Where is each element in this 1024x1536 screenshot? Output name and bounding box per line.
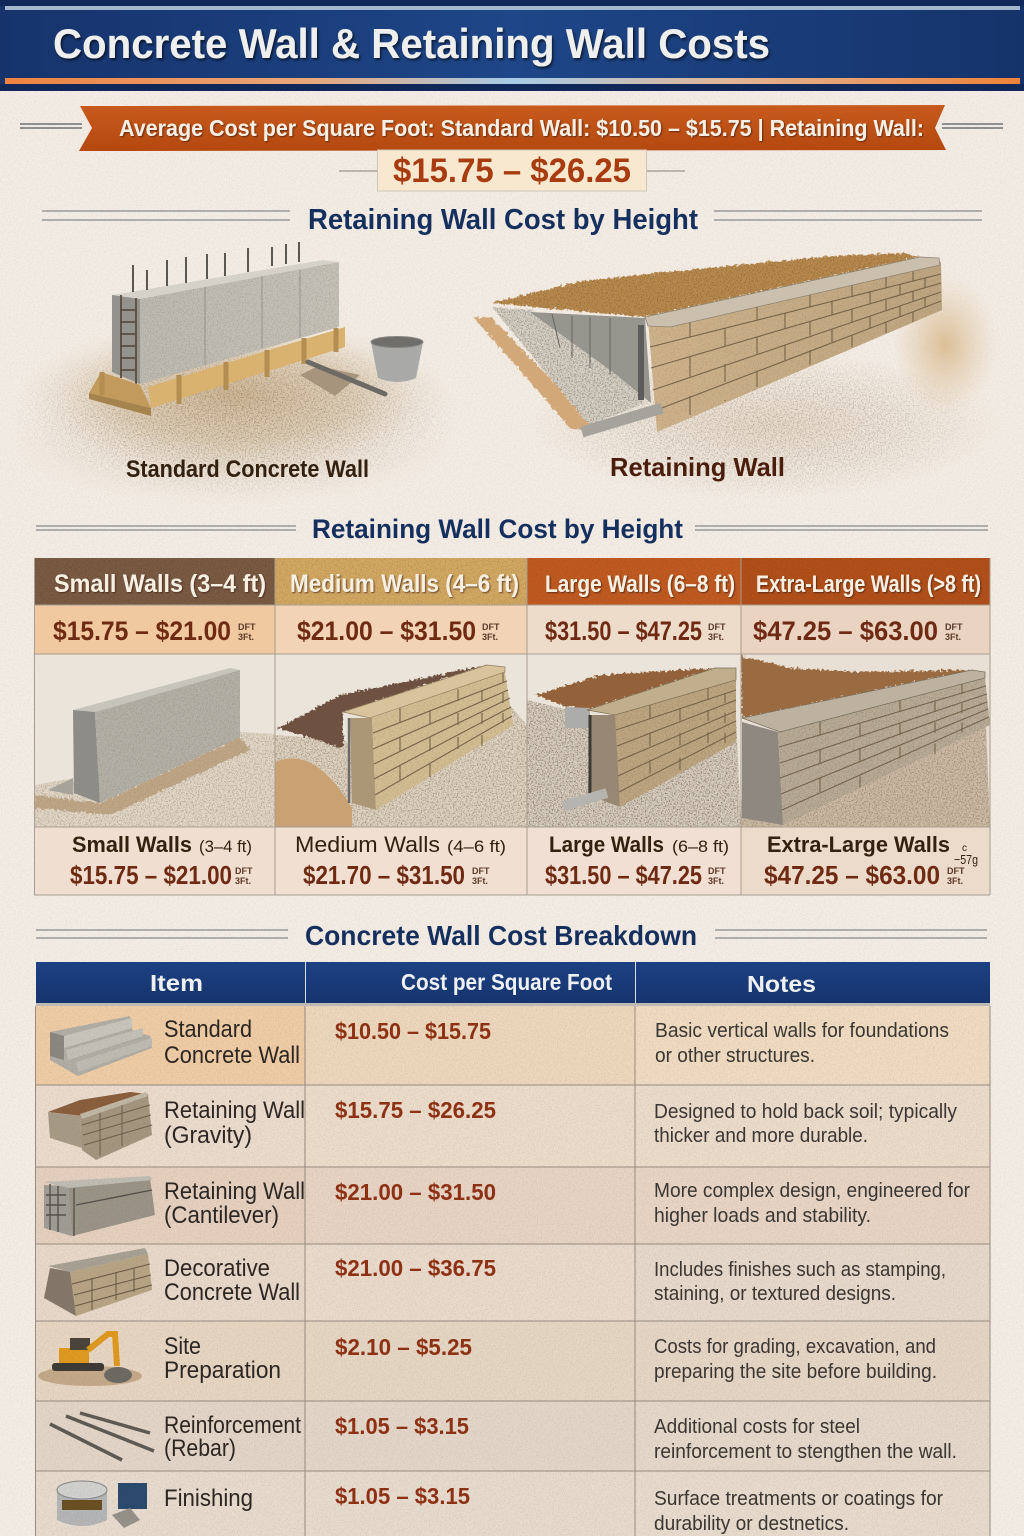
row: finishing — [36, 1471, 990, 1536]
table header: Item — [150, 970, 203, 996]
caption: (4–6 ft) — [447, 837, 506, 856]
caption: $31.50 – $47.25 — [545, 860, 702, 890]
caption: $47.25 – $63.00 — [764, 860, 940, 890]
caption: 3Ft. — [472, 876, 488, 886]
row: reinforcement rebar: (Rebar) — [164, 1435, 236, 1462]
header text: Extra-Large Walls (>8 ft) — [756, 571, 981, 598]
icon: sealant can and box — [57, 1481, 147, 1528]
row: reinforcement rebar — [36, 1401, 990, 1471]
caption: DFT — [235, 866, 253, 876]
caption: c — [962, 843, 967, 854]
row: site preparation: Preparation — [164, 1357, 281, 1384]
price: DFT — [708, 622, 726, 632]
row: retaining wall gravity: Retaining Wall — [164, 1097, 305, 1124]
row: standard concrete wall: Concrete Wall — [164, 1042, 300, 1069]
row: decorative concrete wall: Includes finishes such as stamping, — [654, 1259, 946, 1281]
caption — [545, 832, 729, 890]
icon: gravity wall — [48, 1092, 152, 1160]
row: retaining wall cantilever: Retaining Wall — [164, 1178, 305, 1205]
row: retaining wall gravity — [36, 1085, 990, 1167]
column: large walls — [527, 558, 741, 895]
retaining wall price box — [339, 150, 685, 191]
price: DFT — [945, 622, 963, 632]
trowel tools — [300, 362, 385, 396]
icon: concrete steps — [50, 1016, 152, 1076]
label: retaining wall: Retaining Wall — [610, 452, 785, 482]
row: decorative concrete wall: staining, or textured designs. — [654, 1283, 896, 1305]
medium wall picture — [275, 665, 527, 827]
concrete slab — [112, 260, 339, 384]
row: retaining wall cantilever — [36, 1167, 990, 1244]
row: site preparation: Costs for grading, excavation, and — [654, 1336, 936, 1358]
row: retaining wall cantilever: (Cantilever) — [164, 1202, 279, 1229]
heading: cost by height: Retaining Wall Cost by Height — [312, 514, 683, 544]
caption: DFT — [708, 866, 726, 876]
heading: cost by height top: Retaining Wall Cost by Height — [308, 204, 698, 236]
large wall picture — [527, 668, 741, 827]
block wall face — [648, 262, 942, 432]
price: $31.50 – $47.25 — [545, 616, 702, 646]
row: finishing: $1.05 – $3.15 — [335, 1483, 470, 1509]
icon: cantilever wall — [44, 1176, 155, 1236]
row: reinforcement rebar: $1.05 – $3.15 — [335, 1413, 469, 1439]
illustration: standard concrete wall — [5, 242, 460, 505]
soil bank and gravel — [473, 253, 920, 430]
title: Concrete Wall & Retaining Wall Costs — [53, 20, 770, 67]
price: $47.25 – $63.00 — [753, 616, 938, 646]
table header: Cost per Square Foot — [401, 969, 612, 995]
caption — [70, 832, 253, 890]
rebar — [120, 242, 299, 386]
label: standard concrete wall: Standard Concrete Wall — [126, 456, 369, 483]
caption: Extra-Large Walls — [767, 832, 950, 857]
caption: −57g — [954, 852, 978, 867]
price: $21.00 – $31.50 — [297, 616, 476, 646]
caption: 3Ft. — [235, 876, 251, 886]
row: site preparation: $2.10 – $5.25 — [335, 1334, 472, 1360]
row: site preparation: Site — [164, 1333, 201, 1360]
heading: cost breakdown: Concrete Wall Cost Breakdown — [305, 920, 697, 951]
header text: Large Walls (6–8 ft) — [545, 571, 735, 598]
row: retaining wall cantilever: higher loads and stability. — [654, 1205, 871, 1227]
row: decorative concrete wall: $21.00 – $36.75 — [335, 1255, 496, 1281]
caption — [764, 832, 978, 890]
caption: Large Walls — [549, 832, 664, 857]
price: $15.75 – $21.00 — [53, 616, 231, 646]
row: decorative concrete wall: Decorative — [164, 1255, 270, 1282]
price: DFT — [482, 622, 500, 632]
caption: DFT — [472, 866, 490, 876]
row: standard concrete wall: $10.50 – $15.75 — [335, 1018, 491, 1044]
caption: DFT — [947, 866, 965, 876]
caption: 3Ft. — [947, 876, 963, 886]
caption: (6–8 ft) — [672, 837, 729, 856]
ground sand — [5, 320, 460, 505]
caption: $15.75 – $21.00 — [70, 860, 232, 890]
row: reinforcement rebar: reinforcement to stengthen the wall. — [654, 1441, 957, 1463]
row: standard concrete wall: Basic vertical walls for foundations — [655, 1020, 949, 1042]
caption: (3–4 ft) — [199, 837, 252, 856]
row: decorative concrete wall: Concrete Wall — [164, 1279, 300, 1306]
row: finishing: Finishing — [164, 1485, 253, 1512]
icon: excavator — [38, 1334, 142, 1386]
row: reinforcement rebar: Reinforcement — [164, 1412, 301, 1439]
caption: $21.70 – $31.50 — [303, 860, 465, 890]
row: retaining wall gravity: (Gravity) — [164, 1122, 252, 1149]
header text: Small Walls (3–4 ft) — [54, 570, 266, 598]
row: decorative concrete wall — [36, 1244, 990, 1321]
price: DFT — [238, 622, 256, 632]
heading: cost by height top — [42, 204, 982, 236]
table header — [36, 962, 990, 1006]
row: finishing: Surface treatments or coatings for — [654, 1488, 943, 1510]
breakdown table — [36, 962, 990, 1536]
small wall picture — [35, 668, 275, 827]
table header: Notes — [747, 971, 816, 997]
price: 3Ft. — [708, 632, 724, 642]
illustration: retaining wall — [473, 253, 1005, 500]
row: retaining wall cantilever: More complex design, engineered for — [654, 1180, 970, 1202]
caption: Small Walls — [72, 832, 192, 857]
caption: Medium Walls — [295, 832, 440, 857]
header text: Medium Walls (4–6 ft) — [290, 570, 519, 598]
row: standard concrete wall — [36, 1006, 990, 1085]
drain pipe — [582, 325, 662, 432]
wood formwork — [89, 327, 345, 416]
row: site preparation: preparing the site before building. — [654, 1361, 937, 1383]
height cost table — [34, 558, 990, 895]
column: extra-large walls — [741, 558, 990, 895]
header banner — [0, 0, 1024, 91]
row: retaining wall gravity: $15.75 – $26.25 — [335, 1097, 496, 1123]
caption — [295, 832, 506, 890]
column: medium walls — [275, 558, 527, 895]
wall cap — [645, 257, 940, 327]
retaining wall price box: $15.75 – $26.25 — [393, 152, 631, 190]
heading: cost by height — [36, 514, 988, 544]
ribbon text: Average Cost per Square Foot: Standard Wall: $10.50 – $15.75 | Retaining Wall: — [119, 115, 924, 141]
price: 3Ft. — [945, 632, 961, 642]
ground sand — [530, 275, 1005, 500]
extra-large wall picture — [741, 656, 990, 827]
heading: cost breakdown — [36, 920, 987, 951]
row: retaining wall gravity: thicker and more durable. — [654, 1125, 868, 1147]
row: finishing: durability or destnetics. — [654, 1513, 849, 1535]
average cost ribbon — [20, 105, 1003, 151]
icon: decorative wall — [44, 1248, 152, 1316]
icon: rebar — [50, 1413, 154, 1460]
price: 3Ft. — [482, 632, 498, 642]
row: retaining wall cantilever: $21.00 – $31.50 — [335, 1179, 496, 1205]
price: 3Ft. — [238, 632, 254, 642]
bucket — [371, 336, 423, 382]
row: standard concrete wall: Standard — [164, 1016, 252, 1043]
row: standard concrete wall: or other structures. — [655, 1045, 815, 1067]
caption: 3Ft. — [708, 876, 724, 886]
row: reinforcement rebar: Additional costs for steel — [654, 1416, 860, 1438]
row: retaining wall gravity: Designed to hold back soil; typically — [654, 1101, 957, 1123]
column: small walls — [35, 558, 275, 895]
row: site preparation — [36, 1321, 990, 1401]
